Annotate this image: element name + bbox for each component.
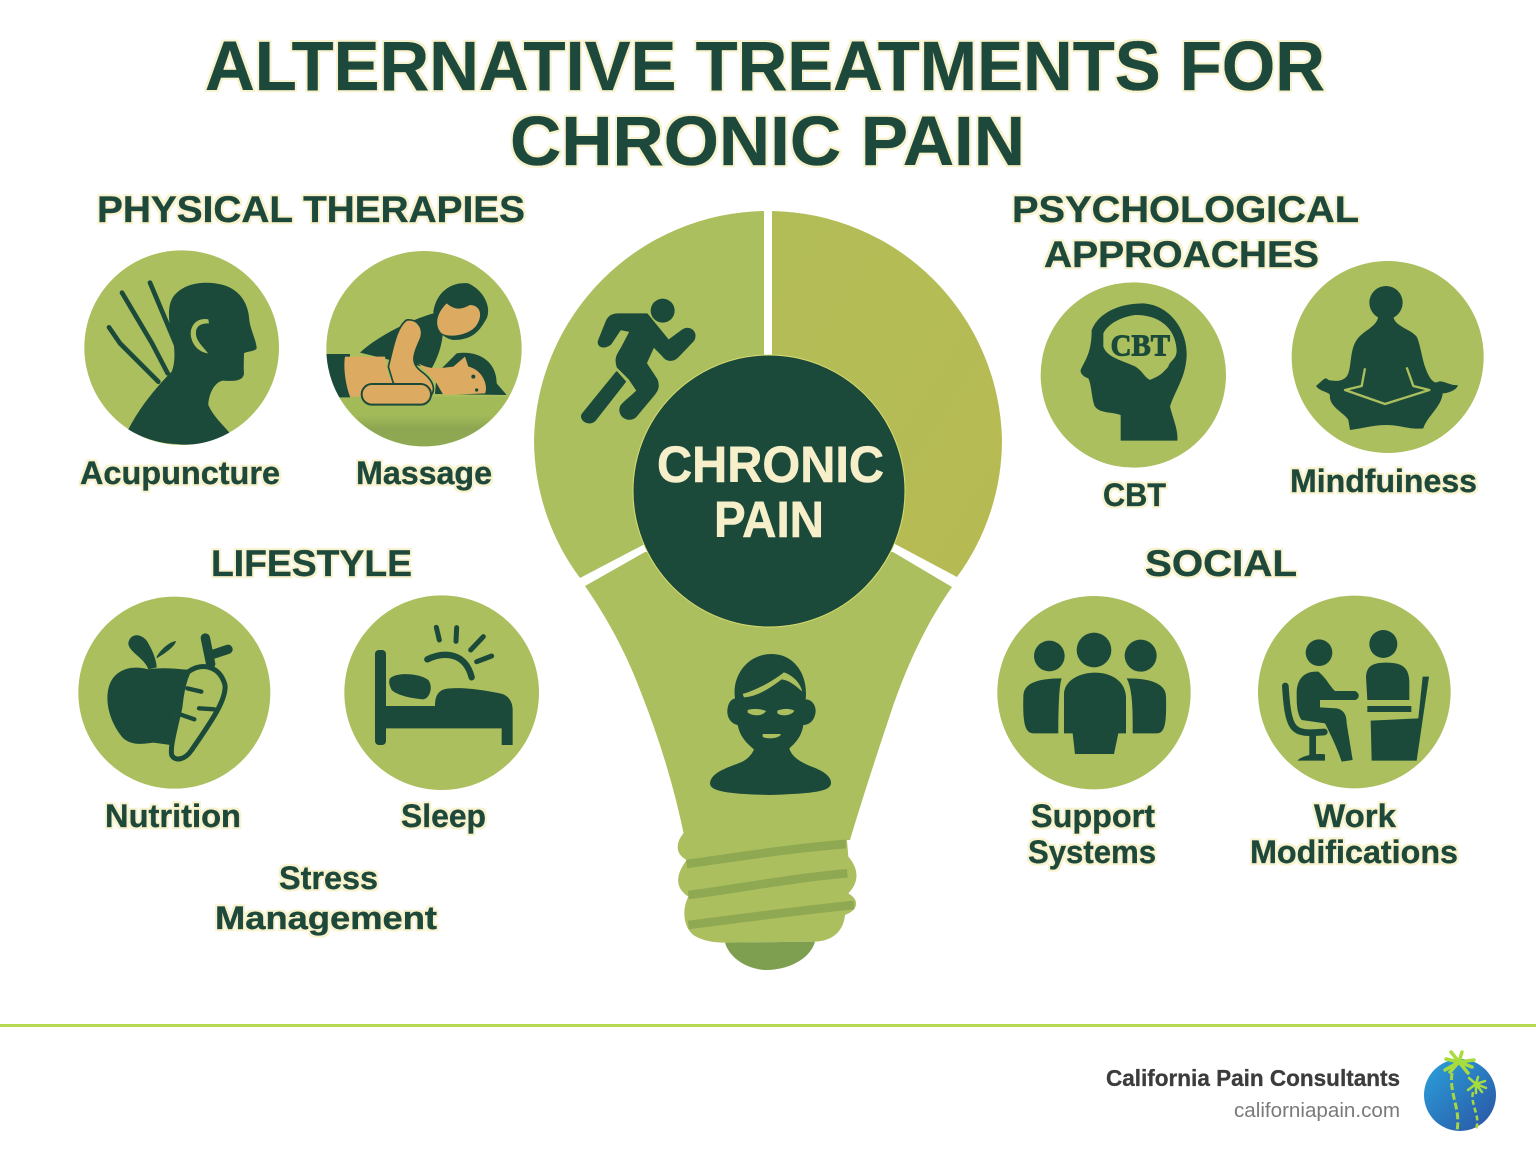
panel: nutrition <box>78 597 270 834</box>
central light bulb <box>534 211 1002 970</box>
panel: mindfulness <box>1290 261 1484 499</box>
icon: person with furrowed brow <box>710 654 831 795</box>
heading: social: SOCIAL <box>1145 543 1297 584</box>
center circle: chronic pain: CHRONIC <box>657 436 884 493</box>
icon: head with CBT brain <box>1041 282 1226 468</box>
heading: psychological approaches: APPROACHES <box>1044 234 1319 275</box>
center circle: chronic pain: PAIN <box>714 491 824 548</box>
bulb segment: upper right <box>772 211 1002 577</box>
heading: psychological approaches <box>1012 189 1359 275</box>
title: CHRONIC PAIN <box>510 102 1025 180</box>
icon: acupuncture head with needles <box>84 250 279 445</box>
title: ALTERNATIVE TREATMENTS FOR <box>205 27 1325 105</box>
heading: physical therapies: PHYSICAL THERAPIES <box>97 189 525 230</box>
icon: group of people <box>997 596 1191 789</box>
panel: acupuncture <box>80 250 280 491</box>
label: massage: Massage <box>356 455 492 491</box>
label: sleep: Sleep <box>401 798 486 834</box>
label: support systems <box>1028 798 1156 870</box>
footer brand <box>1106 1052 1496 1131</box>
icon: two people at a desk <box>1258 596 1451 788</box>
icon: massage <box>323 251 527 450</box>
title <box>205 27 1325 180</box>
footer url: californiapain.com <box>1234 1100 1400 1122</box>
label: work modifications: Modifications <box>1250 834 1458 870</box>
label: work modifications <box>1250 798 1458 870</box>
panel: massage <box>323 251 527 491</box>
bulb segment: upper left with runner <box>534 211 764 578</box>
icon: runner <box>582 299 694 422</box>
label: support systems: Support <box>1031 798 1155 834</box>
icon: bed and sun <box>344 595 539 790</box>
icon: head with CBT brain: CBT <box>1111 329 1170 363</box>
icon: meditating figure <box>1292 261 1484 453</box>
icon: apple and carrot <box>78 597 270 789</box>
center circle: chronic pain <box>633 355 905 627</box>
footer name: California Pain Consultants <box>1106 1065 1400 1091</box>
panel: support systems <box>997 596 1191 870</box>
panel: sleep <box>344 595 539 834</box>
label: cbt: CBT <box>1103 477 1166 513</box>
label: acupuncture: Acupuncture <box>80 455 280 491</box>
icon: palm tree logo <box>1424 1052 1496 1131</box>
panel: cbt <box>1041 282 1226 513</box>
heading: psychological approaches: PSYCHOLOGICAL <box>1012 189 1359 230</box>
label: support systems: Systems <box>1028 834 1156 870</box>
panel: work modifications <box>1250 596 1458 870</box>
label: stress management: Stress <box>279 860 378 896</box>
icon: screw base <box>678 832 856 970</box>
label: work modifications: Work <box>1314 798 1396 834</box>
label: stress management: Management <box>215 900 437 936</box>
label: nutrition: Nutrition <box>105 798 241 834</box>
bulb segment: lower neck <box>585 552 952 840</box>
heading: lifestyle: LIFESTYLE <box>211 543 412 584</box>
label: mindfulness: Mindfuiness <box>1290 463 1477 499</box>
label: stress management <box>215 860 437 936</box>
